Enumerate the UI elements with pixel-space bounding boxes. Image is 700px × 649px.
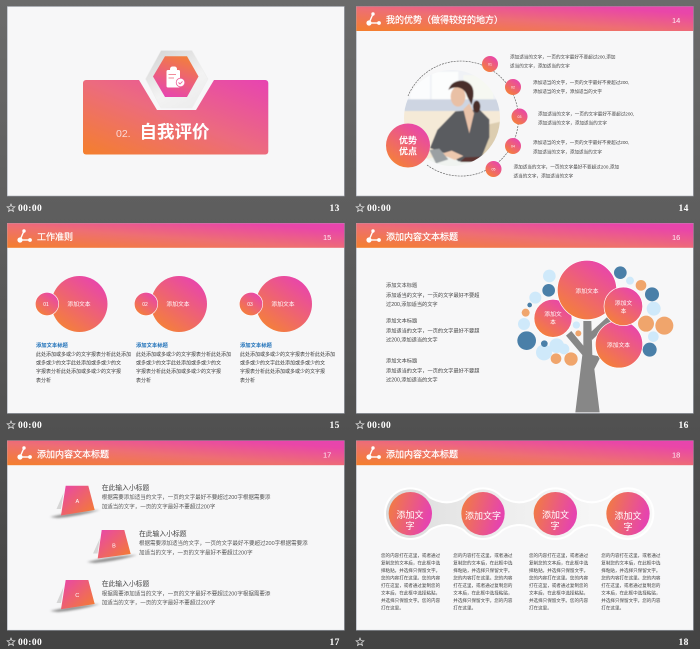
gradient banner xyxy=(83,80,268,154)
section title: 02. xyxy=(116,128,131,140)
strength text items: 添加适当的文字，一页的文字最好不要超过200, xyxy=(533,139,629,146)
badge: 优势优点: 优势 xyxy=(399,134,417,146)
footer: 13 xyxy=(330,204,340,214)
header bar: 工作准则 xyxy=(37,231,73,242)
text C xyxy=(102,579,271,607)
text column 4: 您的内容打在这里，或者通过 xyxy=(601,552,661,559)
text column 3: 打在这里，或者通过复制您的 xyxy=(529,582,589,589)
text column 4: 打在这里，或者通过复制您的 xyxy=(601,582,661,589)
tree trunk xyxy=(566,316,611,412)
text column 4: 并选择只保留文字。您的内容 xyxy=(601,597,661,604)
connected groove with circles: 字 xyxy=(405,520,415,531)
rule 03: 03 xyxy=(247,302,253,308)
connected groove with circles: 添加文字 xyxy=(465,510,501,521)
chart: bubble tree xyxy=(517,260,673,412)
header bar: 我的优势（做得较好的地方） xyxy=(386,14,503,25)
footer xyxy=(7,204,340,214)
rule 01 xyxy=(35,276,131,384)
rule 03: 表分析 xyxy=(240,377,255,384)
badge: 优势优点: 优点 xyxy=(399,146,417,156)
text column 2: 文本后，在此框中选择粘贴， xyxy=(453,590,512,596)
text column 1: 打在这里，或者通过复制您的 xyxy=(381,582,441,589)
text column 2: 您的内容打在这里。您的内容 xyxy=(453,574,513,582)
header bar: 14 xyxy=(672,16,680,25)
footer xyxy=(356,638,689,648)
card B: B xyxy=(112,544,116,550)
left text blocks: 过200,添加适当的文字 xyxy=(386,376,438,384)
text B: 根据需要添加适当的文字，一页的文字最好不要超过200字根据需要添 xyxy=(139,539,308,547)
text A: 加适当的文字，一页的文字最好不要超过200字 xyxy=(102,502,216,510)
text column 2 xyxy=(453,552,513,612)
header bar: 添加内容文本标题 xyxy=(386,448,458,460)
numbered nodes: 04 xyxy=(511,144,515,148)
text column 3: 复制您的文本后，在此框中选 xyxy=(529,560,589,566)
rule 02: 02 xyxy=(142,302,148,308)
header bar: 17 xyxy=(323,450,331,460)
text column 1: 复制您的文本后，在此框中选 xyxy=(381,560,441,566)
strength text items: 添加适当的文字，添加适当的文字 xyxy=(533,148,602,156)
card A xyxy=(50,486,100,518)
text column 4: 择粘贴，并选择只保留文字。 xyxy=(601,567,660,574)
footer: 17 xyxy=(330,638,340,648)
numbered nodes: 03 xyxy=(518,115,521,119)
rule 02: 添加文本 xyxy=(166,300,190,308)
bubble labels: 添加文 xyxy=(544,310,562,318)
text column 3: 打在这里。 xyxy=(529,604,552,612)
bubble labels: 本 xyxy=(550,318,556,326)
text column 1: 打在这里。 xyxy=(381,604,404,612)
header bar xyxy=(7,441,344,465)
footer: 16 xyxy=(678,421,689,431)
connected groove with circles: 字 xyxy=(623,521,633,532)
header bar: 15 xyxy=(323,233,331,242)
photo: woman at desk xyxy=(404,80,500,164)
text B xyxy=(139,529,308,556)
rule 03: 字报表分析此处添加或多或少的文字报 xyxy=(240,368,325,375)
text column 4 xyxy=(601,552,661,612)
bubble labels: 本 xyxy=(621,307,627,315)
footer xyxy=(356,421,689,431)
text column 2: 打在这里，或者通过复制您的 xyxy=(453,582,513,589)
rule 01: 添加文本标题 xyxy=(36,341,68,349)
text column 1: 文本后，在此框中选择粘贴， xyxy=(381,590,440,596)
footer: 00:00 xyxy=(367,204,391,214)
rule 01: 表分析 xyxy=(36,377,51,384)
footer: 14 xyxy=(678,204,689,214)
rule 03: 或多或少的文字此处添加或多或少的文 xyxy=(240,360,325,366)
header bar xyxy=(356,6,693,31)
rule 02: 此处添加或多或少的文字报表分析此处添加 xyxy=(136,351,231,358)
strength text items: 添加适当的文字，一页的文字最好不要超过200,添加 xyxy=(510,54,616,60)
left text blocks: 添加适当的文字，一页的文字最好不要超 xyxy=(386,291,480,299)
rule 03: 添加文本 xyxy=(271,300,295,308)
strength text items: 添加适当的文字，添加适当的文字 xyxy=(533,88,602,95)
connected groove with circles: 字 xyxy=(550,520,560,531)
rule 03 xyxy=(239,276,335,384)
text column 1 xyxy=(381,552,441,612)
text column 1: 择粘贴，并选择只保留文字。 xyxy=(381,567,440,574)
numbered nodes xyxy=(482,56,528,177)
text B: 加适当的文字，一页的文字最好不要超过200字 xyxy=(139,548,253,556)
panel: slide 13 section cover xyxy=(7,6,344,214)
text column 3: 您的内容打在这里。您的内容 xyxy=(529,574,589,582)
footer: 15 xyxy=(330,421,340,431)
footer: 00:00 xyxy=(18,204,42,214)
white notch xyxy=(139,80,214,110)
text column 3: 您的内容打在这里，或者通过 xyxy=(529,552,589,559)
text B: 在此输入小标题 xyxy=(139,529,187,538)
rule 01: 添加文本 xyxy=(67,300,91,308)
header bar xyxy=(356,223,693,248)
text column 4: 复制您的文本后，在此框中选 xyxy=(601,560,661,566)
connected groove with circles: 添加文 xyxy=(614,510,642,521)
header bar xyxy=(356,441,693,465)
strength text items: 适当的文字，添加适当的文字 xyxy=(514,172,574,180)
left text blocks: 过200,添加适当的文字 xyxy=(386,300,438,308)
text column 3: 并选择只保留文字。您的内容 xyxy=(529,597,589,604)
strength text items: 添加适当的文字，添加适当的文字 xyxy=(538,120,607,126)
left text blocks: 添加文本标题 xyxy=(386,281,417,289)
rule 01: 此处添加或多或少的文字报表分析此处添加 xyxy=(36,351,131,358)
rule 02: 添加文本标题 xyxy=(136,341,168,349)
text column 2: 复制您的文本后，在此框中选 xyxy=(453,560,513,566)
rule 01: 或多或少的文字此处添加或多或少的文 xyxy=(36,360,121,366)
strength text items: 添加适当的文字，一页的文字最好不要超过200,添加 xyxy=(514,164,619,170)
rule 01: 字报表分析此处添加或多或少的文字报 xyxy=(36,368,121,375)
header bar: 16 xyxy=(672,233,680,242)
bubble labels xyxy=(544,287,632,349)
bubble labels: 添加文 xyxy=(615,299,632,307)
text A xyxy=(102,483,271,510)
footer: 00:00 xyxy=(18,421,42,431)
header bar: 添加内容文本标题 xyxy=(37,448,109,460)
strength text items: 添加适当的文字，一页的文字最好不要超过200, xyxy=(533,79,629,86)
header bar: 18 xyxy=(672,450,680,460)
footer xyxy=(356,204,689,214)
numbered nodes: 02 xyxy=(511,86,515,90)
dark bubbles xyxy=(517,266,659,357)
footer: 00:00 xyxy=(18,638,42,648)
panel: slide 15 work rules xyxy=(7,223,344,431)
header bar: 添加内容文本标题 xyxy=(386,231,458,242)
left text blocks: 添加文本标题 xyxy=(386,356,417,364)
text column 3 xyxy=(529,552,589,612)
card C xyxy=(50,580,100,612)
panel: slide 14 strengths xyxy=(356,6,693,214)
light bubbles xyxy=(518,270,661,360)
left text blocks xyxy=(386,281,480,384)
text A: 根据需要添加适当的文字，一页的文字最好不要超过200字根据需要添 xyxy=(102,493,271,501)
connected groove with circles: 添加文 xyxy=(396,509,424,520)
rule 02: 表分析 xyxy=(136,377,151,384)
text column 2: 您的内容打在这里，或者通过 xyxy=(453,552,513,559)
text column 4: 打在这里。 xyxy=(601,604,624,612)
card B xyxy=(87,530,137,563)
dashed ring xyxy=(408,61,518,176)
rule 02: 或多或少的文字此处添加或多或少的文 xyxy=(136,360,221,366)
numbered nodes: 01 xyxy=(488,62,492,66)
text column 3: 文本后，在此框中选择粘贴， xyxy=(529,590,588,596)
text A: 在此输入小标题 xyxy=(102,483,149,492)
section title: 自我评价 xyxy=(140,122,210,142)
text column 1: 并选择只保留文字。您的内容 xyxy=(381,597,441,604)
text column 3: 择粘贴，并选择只保留文字。 xyxy=(529,567,588,574)
left text blocks: 过200,添加适当的文字 xyxy=(386,336,438,344)
text column 4: 文本后，在此框中选择粘贴， xyxy=(601,590,660,596)
text column 1: 您的内容打在这里。您的内容 xyxy=(381,574,441,582)
card A: A xyxy=(75,499,79,505)
rule 03: 此处添加或多或少的文字报表分析此处添加 xyxy=(240,351,335,358)
strength text items: 适当的文字，添加适当的文字 xyxy=(510,62,570,70)
text column 2: 择粘贴，并选择只保留文字。 xyxy=(453,567,512,574)
rule 02: 字报表分析此处添加或多或少的文字报 xyxy=(136,368,221,375)
orange bubbles xyxy=(522,280,673,366)
icon: hexagon badge with clipboard xyxy=(146,50,208,108)
text column 4: 您的内容打在这里。您的内容 xyxy=(601,574,661,582)
panel: slide 18 process circles xyxy=(356,441,693,648)
rule 03: 添加文本标题 xyxy=(240,341,272,349)
text C: 加适当的文字，一页的文字最好不要超过200字 xyxy=(102,599,216,607)
left text blocks: 添加文本标题 xyxy=(386,316,417,324)
footer xyxy=(7,421,340,431)
rule 01: 01 xyxy=(43,302,49,308)
large gradient bubbles xyxy=(534,260,643,368)
connected groove with circles xyxy=(386,489,652,538)
text C: 在此输入小标题 xyxy=(102,579,149,588)
text C: 根据需要添加适当的文字，一页的文字最好不要超过200字根据需要添 xyxy=(102,590,271,598)
panel: slide 16 tree xyxy=(356,223,693,431)
text column 2: 并选择只保留文字。您的内容 xyxy=(453,597,513,604)
left text blocks: 添加适当的文字，一页的文字最好不要超 xyxy=(386,326,480,334)
text column 1: 您的内容打在这里，或者通过 xyxy=(381,552,441,559)
card C: C xyxy=(75,593,79,599)
strength text items: 添加适当的文字，一页的文字最好不要超过200, xyxy=(538,110,634,118)
left text blocks: 添加适当的文字，一页的文字最好不要超 xyxy=(386,366,480,374)
rule 02 xyxy=(134,276,231,384)
badge: 优势优点 xyxy=(386,124,430,168)
connected groove with circles: 添加文 xyxy=(542,509,569,520)
footer: 00:00 xyxy=(367,421,391,431)
footer xyxy=(7,638,340,648)
panel: slide 17 cards xyxy=(7,441,344,648)
bubble labels: 添加文本 xyxy=(575,287,599,295)
numbered nodes: 05 xyxy=(492,168,495,172)
text column 2: 打在这里。 xyxy=(453,604,476,612)
header bar xyxy=(7,223,344,248)
footer: 18 xyxy=(678,638,689,648)
strength text items xyxy=(510,54,634,180)
bubble labels: 添加文本 xyxy=(607,341,630,349)
